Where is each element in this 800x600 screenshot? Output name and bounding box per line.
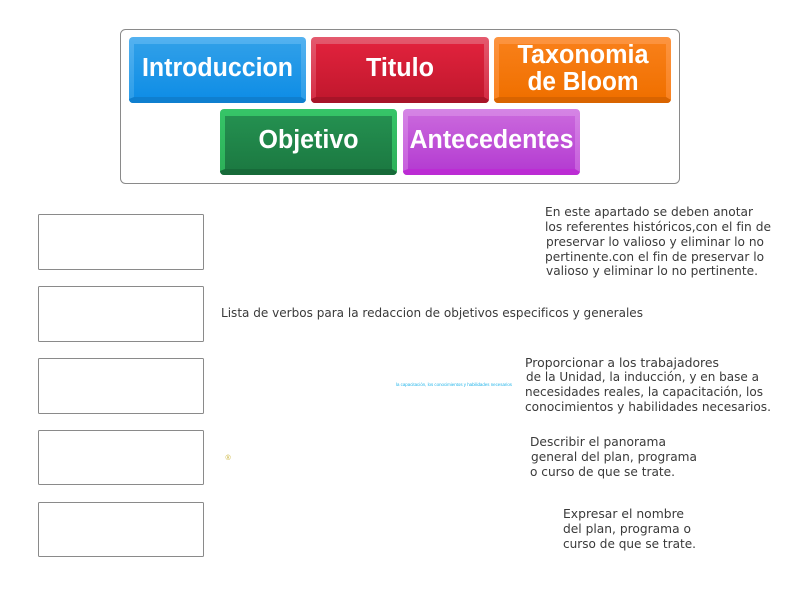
- text: antecedentes description: los referentes históricos,con el fin de: [545, 219, 771, 234]
- text: antecedentes description: pertinente.con el fin de preservar lo: [545, 249, 764, 264]
- text: titulo description: [563, 506, 696, 551]
- panel: answer tiles: [120, 30, 680, 184]
- text: objetivo description: de la Unidad, la inducción, y en base a: [526, 369, 759, 384]
- text: titulo description: curso de que se trate.: [563, 536, 696, 551]
- tile: Titulo: Titulo: [366, 54, 434, 82]
- tile: Taxonomia de Bloom: de Bloom: [528, 68, 638, 96]
- text: objetivo description: conocimientos y habilidades necesarios.: [525, 399, 771, 414]
- tiny cyan text: la capacitación, los conocimientos y habilidades necesarios: [396, 382, 513, 387]
- tile: Objetivo: Objetivo: [258, 126, 358, 154]
- drop box 2: [38, 286, 204, 342]
- drop box 3: [38, 358, 204, 414]
- text: introduccion description: [530, 434, 697, 479]
- tiny yellow mark: ®: [226, 454, 232, 462]
- text: antecedentes description: valioso y eliminar lo no pertinente.: [546, 263, 758, 278]
- drop box 5: [38, 502, 204, 556]
- tile: Antecedentes: [403, 109, 580, 175]
- text: taxonomia description: Lista de verbos para la redaccion de objetivos especificos y generales: [221, 305, 643, 320]
- text: objetivo description: Proporcionar a los trabajadores: [525, 355, 719, 370]
- tile: Introduccion: [129, 37, 306, 103]
- tile: Introduccion: Introduccion: [142, 54, 293, 82]
- text: antecedentes description: En este apartado se deben anotar: [545, 204, 754, 219]
- text: titulo description: del plan, programa o: [563, 521, 691, 536]
- text: titulo description: Expresar el nombre: [563, 506, 684, 521]
- text: objetivo description: [525, 355, 771, 414]
- text: antecedentes description: [545, 204, 771, 278]
- tile: Titulo: [311, 37, 489, 103]
- text: objetivo description: necesidades reales, la capacitación, los: [525, 384, 763, 399]
- tile: Taxonomia de Bloom: Taxonomia: [518, 41, 649, 69]
- text: antecedentes description: preservar lo valioso y eliminar lo no: [546, 234, 764, 249]
- drop box 4: [38, 430, 204, 484]
- tile: Objetivo: [220, 109, 397, 175]
- text: introduccion description: Describir el panorama: [530, 434, 666, 449]
- tile: Taxonomia de Bloom: [494, 37, 671, 103]
- tile: Antecedentes: Antecedentes: [410, 126, 574, 154]
- text: introduccion description: general del plan, programa: [531, 449, 697, 464]
- text: introduccion description: o curso de que se trate.: [530, 464, 675, 479]
- drop box 1: [38, 214, 204, 270]
